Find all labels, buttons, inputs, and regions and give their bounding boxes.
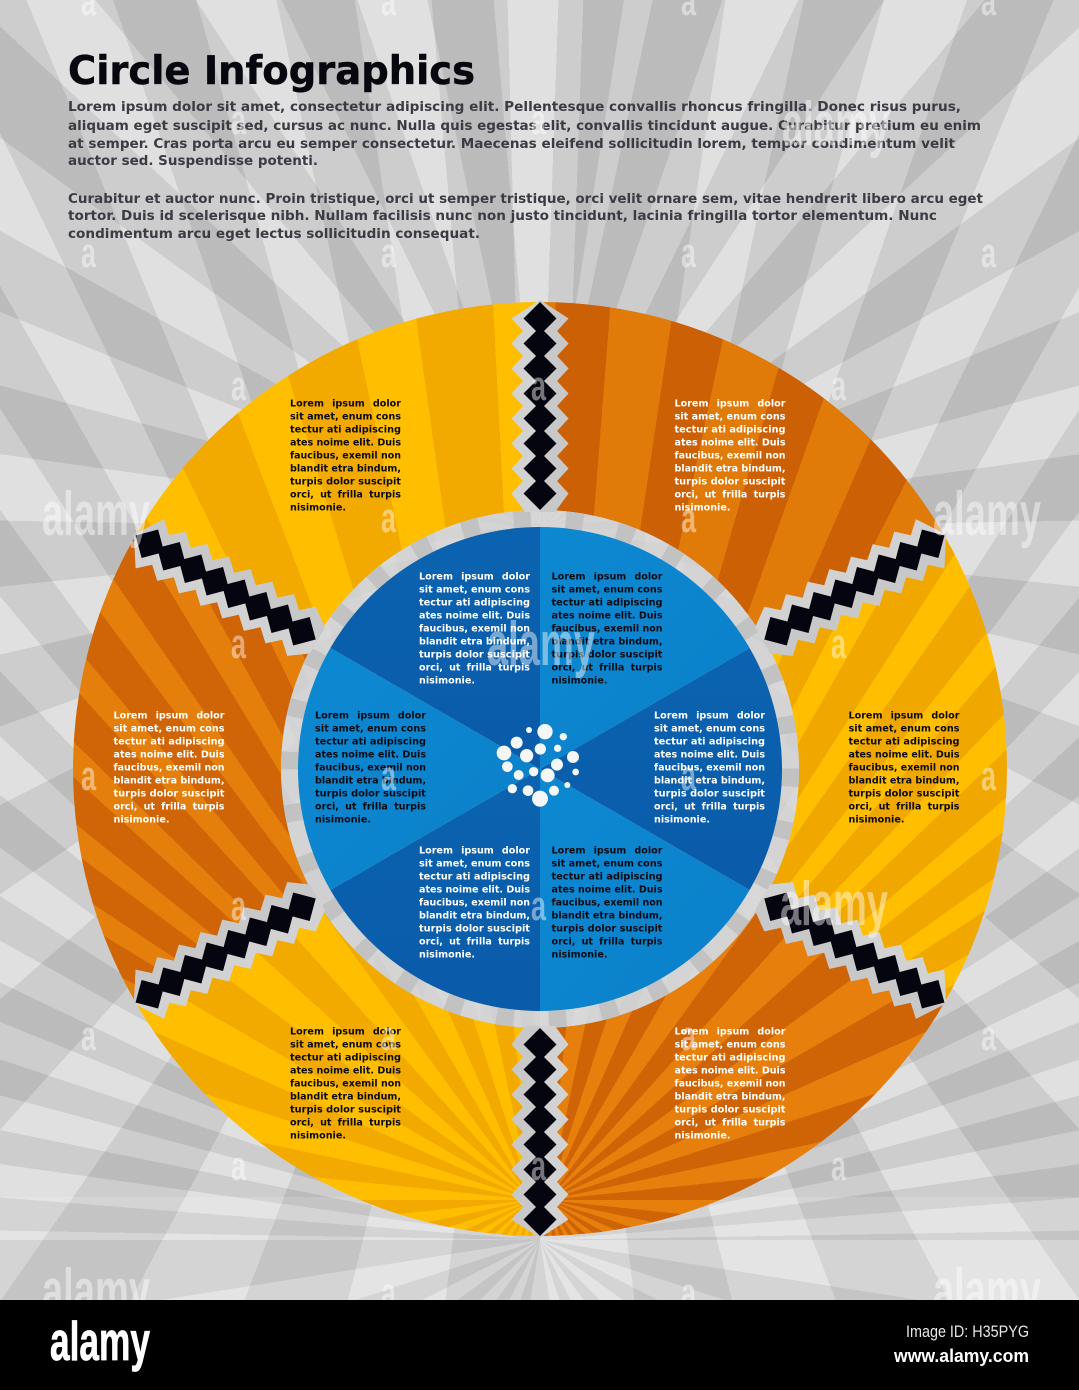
text block: hub bottom left wedge: tectur ati adipiscing bbox=[419, 872, 530, 882]
text block: hub top left wedge: turpis dolor suscipit bbox=[419, 650, 530, 660]
watermark: alamy marks: a bbox=[831, 1142, 846, 1189]
text block: hub top left wedge: orci, ut frilla turpis bbox=[419, 662, 530, 674]
text block: left orange sector: sit amet, enum cons bbox=[114, 724, 225, 734]
text block: hub bottom left wedge: turpis dolor suscipit bbox=[419, 924, 530, 934]
text block: right yellow sector: faucibus, exemil non bbox=[848, 762, 960, 774]
footer: alamy logo: alamy bbox=[50, 1310, 150, 1372]
watermark: alamy marks: a bbox=[381, 752, 396, 799]
watermark: alamy marks: a bbox=[831, 362, 846, 409]
watermark: alamy marks: a bbox=[981, 752, 996, 799]
text block: hub right wedge: faucibus, exemil non bbox=[654, 762, 765, 774]
text block: bottom left yellow sector: tectur ati adipiscing bbox=[290, 1052, 401, 1064]
text block: top right orange sector bbox=[674, 398, 786, 514]
text block: hub right wedge: ates noime elit. Duis bbox=[654, 750, 765, 760]
text block: top left yellow sector: turpis dolor suscipit bbox=[290, 476, 401, 488]
text block: right yellow sector: Lorem ipsum dolor bbox=[848, 710, 960, 722]
intro paragraph one: Lorem ipsum dolor sit amet, consectetur adipiscing elit. Pellentesque convallis rhoncus fringilla. Donec risus purus, bbox=[68, 100, 961, 115]
text block: hub bottom right wedge: orci, ut frilla turpis bbox=[552, 936, 663, 948]
sector: right yellow bbox=[772, 538, 1007, 1000]
text block: left orange sector: faucibus, exemil non bbox=[114, 762, 224, 774]
text block: hub bottom left wedge: blandit etra bindum, bbox=[419, 910, 530, 922]
text block: left orange sector: ates noime elit. Duis bbox=[114, 750, 225, 760]
watermark: alamy marks: a bbox=[831, 620, 846, 667]
text block: hub top right wedge: faucibus, exemil non bbox=[552, 624, 662, 634]
text block: hub top left wedge bbox=[419, 572, 530, 686]
sector: bottom left yellow bbox=[137, 912, 537, 1236]
text block: hub right wedge: nisimonie. bbox=[654, 814, 710, 826]
watermark: alamy marks: a bbox=[381, 229, 396, 276]
text block: hub bottom left wedge bbox=[419, 846, 530, 960]
text block: bottom left yellow sector: faucibus, exemil non bbox=[290, 1078, 401, 1090]
watermark: alamy marks: a bbox=[381, 1269, 396, 1316]
text block: hub left wedge: tectur ati adipiscing bbox=[315, 736, 426, 748]
text block: hub bottom left wedge: Lorem ipsum dolor bbox=[419, 846, 530, 856]
text block: hub bottom right wedge: Lorem ipsum dolor bbox=[552, 846, 663, 856]
watermark: alamy marks: alamy bbox=[42, 480, 150, 549]
intro paragraph two: condimentum arcu eget lectus sollicitudin consequat. bbox=[68, 227, 480, 242]
separator: lower right bbox=[748, 873, 960, 1028]
text block: hub bottom left wedge: orci, ut frilla turpis bbox=[419, 936, 530, 948]
text block: top left yellow sector: orci, ut frilla turpis bbox=[290, 490, 401, 500]
sector: top left yellow bbox=[137, 302, 537, 626]
watermark: alamy marks: a bbox=[531, 362, 546, 409]
text block: hub right wedge: orci, ut frilla turpis bbox=[654, 802, 765, 812]
watermark: alamy marks: a bbox=[681, 1269, 696, 1316]
text block: top left yellow sector: nisimonie. bbox=[290, 502, 346, 514]
text block: top left yellow sector: faucibus, exemil non bbox=[290, 450, 401, 462]
text block: hub right wedge: tectur ati adipiscing bbox=[654, 736, 765, 748]
separators: zigzag black diamond chains bbox=[120, 300, 960, 1238]
text block: bottom left yellow sector bbox=[290, 1026, 401, 1142]
text block: hub top right wedge: ates noime elit. Duis bbox=[552, 610, 663, 622]
watermark: alamy marks: a bbox=[981, 1012, 996, 1059]
text block: top left yellow sector: Lorem ipsum dolor bbox=[290, 398, 401, 410]
text block: bottom right orange sector: turpis dolor suscipit bbox=[674, 1104, 786, 1116]
text block: hub bottom right wedge: tectur ati adipiscing bbox=[552, 872, 662, 882]
text block: bottom right orange sector: Lorem ipsum dolor bbox=[674, 1026, 786, 1038]
text block: hub bottom left wedge: faucibus, exemil non bbox=[419, 898, 530, 908]
text block: left orange sector: Lorem ipsum dolor bbox=[114, 710, 225, 722]
text block: top right orange sector: turpis dolor suscipit bbox=[674, 476, 786, 488]
sector: top right orange bbox=[543, 302, 943, 626]
watermark: alamy marks: a bbox=[531, 96, 546, 143]
text block: hub bottom left wedge: ates noime elit. Duis bbox=[419, 884, 530, 896]
footer: image id: Image ID: H35PYG bbox=[906, 1322, 1029, 1341]
intro paragraph two: tortor. Duis id scelerisque nibh. Nullam facilisis nunc non justo tincidunt, lacinia fringilla tortor elementum. Nunc bbox=[68, 209, 937, 224]
watermark: alamy marks: a bbox=[81, 1012, 96, 1059]
text block: hub bottom right wedge: nisimonie. bbox=[552, 950, 608, 960]
watermark: alamy marks: a bbox=[231, 620, 246, 667]
text block: bottom right orange sector: tectur ati adipiscing bbox=[674, 1052, 786, 1064]
watermark: alamy marks: a bbox=[381, 494, 396, 541]
text block: right yellow sector: ates noime elit. Duis bbox=[848, 750, 960, 760]
text block: bottom right orange sector: orci, ut frilla turpis bbox=[674, 1118, 786, 1128]
watermark: alamy marks: a bbox=[231, 362, 246, 409]
text block: hub top left wedge: blandit etra bindum, bbox=[419, 636, 530, 648]
text block: top right orange sector: nisimonie. bbox=[674, 502, 730, 514]
text block: left orange sector: blandit etra bindum, bbox=[114, 776, 224, 786]
separator: bottom bbox=[512, 1026, 568, 1238]
text block: left orange sector: nisimonie. bbox=[114, 814, 170, 826]
text block: bottom left yellow sector: Lorem ipsum dolor bbox=[290, 1026, 401, 1038]
text block: hub top left wedge: faucibus, exemil non bbox=[419, 624, 530, 634]
text block: bottom right orange sector: faucibus, exemil non bbox=[674, 1078, 786, 1090]
separator: upper left bbox=[120, 510, 332, 665]
text block: left orange sector: orci, ut frilla turpis bbox=[114, 802, 225, 812]
icon: white dot cluster bbox=[497, 724, 579, 807]
text block: right yellow sector: sit amet, enum cons bbox=[848, 724, 960, 734]
watermark: alamy marks: a bbox=[381, 1012, 396, 1059]
intro paragraph one bbox=[68, 100, 981, 169]
text block: left orange sector bbox=[114, 710, 225, 826]
text block: hub left wedge: orci, ut frilla turpis bbox=[315, 802, 426, 812]
text block: hub top right wedge: orci, ut frilla turpis bbox=[552, 662, 663, 674]
sector: bottom right orange bbox=[543, 912, 943, 1236]
watermark: alamy marks: a bbox=[81, 229, 96, 276]
text block: hub left wedge: faucibus, exemil non bbox=[315, 762, 426, 774]
text block: hub top right wedge bbox=[552, 572, 663, 686]
watermark: alamy marks: a bbox=[531, 882, 546, 929]
text block: hub left wedge: Lorem ipsum dolor bbox=[315, 710, 426, 722]
text block: bottom left yellow sector: ates noime elit. Duis bbox=[290, 1066, 401, 1076]
intro paragraph one: auctor sed. Suspendisse potenti. bbox=[68, 154, 318, 169]
text block: bottom left yellow sector: nisimonie. bbox=[290, 1130, 346, 1142]
watermark: alamy marks: a bbox=[681, 229, 696, 276]
text block: hub top right wedge: sit amet, enum cons bbox=[552, 584, 663, 596]
watermark: alamy marks: alamy bbox=[487, 610, 595, 679]
text block: bottom right orange sector: blandit etra bindum, bbox=[674, 1092, 786, 1102]
separator: upper right bbox=[748, 510, 960, 665]
text block: hub right wedge bbox=[654, 710, 765, 826]
blue hub: six wedges bbox=[298, 527, 782, 1011]
text block: top left yellow sector: tectur ati adipiscing bbox=[290, 424, 401, 436]
watermark: alamy marks: a bbox=[231, 1142, 246, 1189]
text block: bottom right orange sector: sit amet, enum cons bbox=[674, 1040, 786, 1050]
text block: top right orange sector: orci, ut frilla turpis bbox=[674, 490, 786, 500]
text block: top right orange sector: sit amet, enum cons bbox=[674, 412, 786, 422]
text block: hub left wedge: sit amet, enum cons bbox=[315, 724, 426, 734]
text block: top left yellow sector: blandit etra bindum, bbox=[290, 464, 401, 474]
title: Circle Infographics bbox=[68, 49, 475, 94]
text block: top right orange sector: faucibus, exemil non bbox=[674, 450, 786, 462]
footer: website: www.alamy.com bbox=[893, 1346, 1029, 1366]
sector: left orange bbox=[73, 538, 308, 1000]
text block: top right orange sector: blandit etra bindum, bbox=[674, 464, 786, 474]
separator: lower left bbox=[120, 873, 332, 1028]
text block: hub top left wedge: tectur ati adipiscing bbox=[419, 598, 530, 608]
text block: hub bottom left wedge: sit amet, enum cons bbox=[419, 858, 530, 870]
text block: hub bottom right wedge: faucibus, exemil non bbox=[552, 898, 662, 908]
text block: hub left wedge: nisimonie. bbox=[315, 814, 371, 826]
text block: hub left wedge: blandit etra bindum, bbox=[315, 776, 426, 786]
footer bar bbox=[0, 1300, 1079, 1390]
text block: hub left wedge: ates noime elit. Duis bbox=[315, 750, 426, 760]
text block: bottom right orange sector: nisimonie. bbox=[674, 1130, 730, 1142]
text block: hub top right wedge: turpis dolor suscipit bbox=[552, 650, 663, 660]
text block: hub top left wedge: Lorem ipsum dolor bbox=[419, 572, 530, 582]
text block: hub left wedge bbox=[315, 710, 426, 826]
watermark: alamy marks: a bbox=[231, 96, 246, 143]
grey ring around the blue hub bbox=[281, 510, 799, 1028]
text block: bottom right orange sector: ates noime elit. Duis bbox=[674, 1066, 786, 1076]
text block: hub right wedge: blandit etra bindum, bbox=[654, 776, 765, 786]
text block: right yellow sector: blandit etra bindum, bbox=[848, 776, 960, 786]
text block: bottom left yellow sector: blandit etra bindum, bbox=[290, 1092, 401, 1102]
text block: hub bottom right wedge bbox=[552, 846, 663, 960]
text block: hub top left wedge: sit amet, enum cons bbox=[419, 584, 530, 596]
text block: hub bottom right wedge: ates noime elit. Duis bbox=[552, 884, 663, 896]
text block: top left yellow sector bbox=[290, 398, 401, 514]
text block: right yellow sector: nisimonie. bbox=[848, 814, 904, 826]
text block: right yellow sector: orci, ut frilla turpis bbox=[848, 802, 960, 812]
text block: top right orange sector: tectur ati adipiscing bbox=[674, 424, 786, 436]
separator: top bbox=[512, 300, 568, 512]
watermark: alamy marks: alamy bbox=[782, 90, 890, 159]
intro paragraph two bbox=[68, 192, 983, 242]
text block: left orange sector: tectur ati adipiscing bbox=[114, 736, 224, 748]
watermark: alamy marks: a bbox=[231, 882, 246, 929]
watermark: alamy marks: alamy bbox=[780, 870, 888, 939]
text block: hub left wedge: turpis dolor suscipit bbox=[315, 788, 426, 800]
text block: left orange sector: turpis dolor suscipit bbox=[114, 788, 225, 800]
text block: top left yellow sector: sit amet, enum cons bbox=[290, 412, 401, 422]
watermark: alamy marks: a bbox=[681, 752, 696, 799]
intro paragraph two: Curabitur et auctor nunc. Proin tristique, orci ut semper tristique, orci velit ornare sem, vitae hendrerit libero arcu eget bbox=[68, 192, 983, 207]
text block: bottom left yellow sector: turpis dolor suscipit bbox=[290, 1104, 401, 1116]
text block: hub top right wedge: Lorem ipsum dolor bbox=[552, 572, 663, 582]
intro paragraph one: aliquam eget suscipit sed, cursus ac nunc. Nulla quis egestas elit, convallis tincidunt augue. Curabitur pretium eu enim bbox=[68, 119, 981, 134]
watermark: alamy marks: alamy bbox=[42, 1257, 150, 1326]
text block: bottom left yellow sector: sit amet, enum cons bbox=[290, 1040, 401, 1050]
watermark: alamy marks: a bbox=[981, 229, 996, 276]
text block: hub top left wedge: nisimonie. bbox=[419, 676, 475, 686]
text block: hub bottom left wedge: nisimonie. bbox=[419, 950, 475, 960]
text block: hub right wedge: turpis dolor suscipit bbox=[654, 788, 765, 800]
text block: top right orange sector: Lorem ipsum dolor bbox=[674, 398, 786, 410]
text block: hub top right wedge: tectur ati adipiscing bbox=[552, 598, 662, 608]
text block: hub top left wedge: ates noime elit. Duis bbox=[419, 610, 530, 622]
text block: hub right wedge: sit amet, enum cons bbox=[654, 724, 765, 734]
watermark: alamy marks: a bbox=[681, 494, 696, 541]
text block: hub bottom right wedge: turpis dolor suscipit bbox=[552, 924, 663, 934]
text block: top left yellow sector: ates noime elit. Duis bbox=[290, 438, 401, 448]
text block: hub top right wedge: nisimonie. bbox=[552, 676, 608, 686]
watermark: alamy marks: a bbox=[81, 752, 96, 799]
text block: hub right wedge: Lorem ipsum dolor bbox=[654, 710, 765, 722]
text block: hub bottom right wedge: sit amet, enum cons bbox=[552, 858, 663, 870]
text block: bottom right orange sector bbox=[674, 1026, 786, 1142]
text block: top right orange sector: ates noime elit. Duis bbox=[674, 438, 786, 448]
watermark: alamy marks: a bbox=[681, 1012, 696, 1059]
watermark: alamy marks: a bbox=[531, 1142, 546, 1189]
intro paragraph one: at semper. Cras porta arcu eu semper consectetur. Maecenas eleifend sollicitudin lorem, tempor condimentum velit bbox=[68, 137, 955, 152]
text block: right yellow sector: tectur ati adipiscing bbox=[848, 736, 960, 748]
text block: right yellow sector bbox=[848, 710, 960, 826]
text block: hub top right wedge: blandit etra bindum, bbox=[552, 636, 662, 648]
text block: right yellow sector: turpis dolor suscipit bbox=[848, 788, 960, 800]
text block: bottom left yellow sector: orci, ut frilla turpis bbox=[290, 1118, 401, 1128]
text block: hub bottom right wedge: blandit etra bindum, bbox=[552, 910, 662, 922]
